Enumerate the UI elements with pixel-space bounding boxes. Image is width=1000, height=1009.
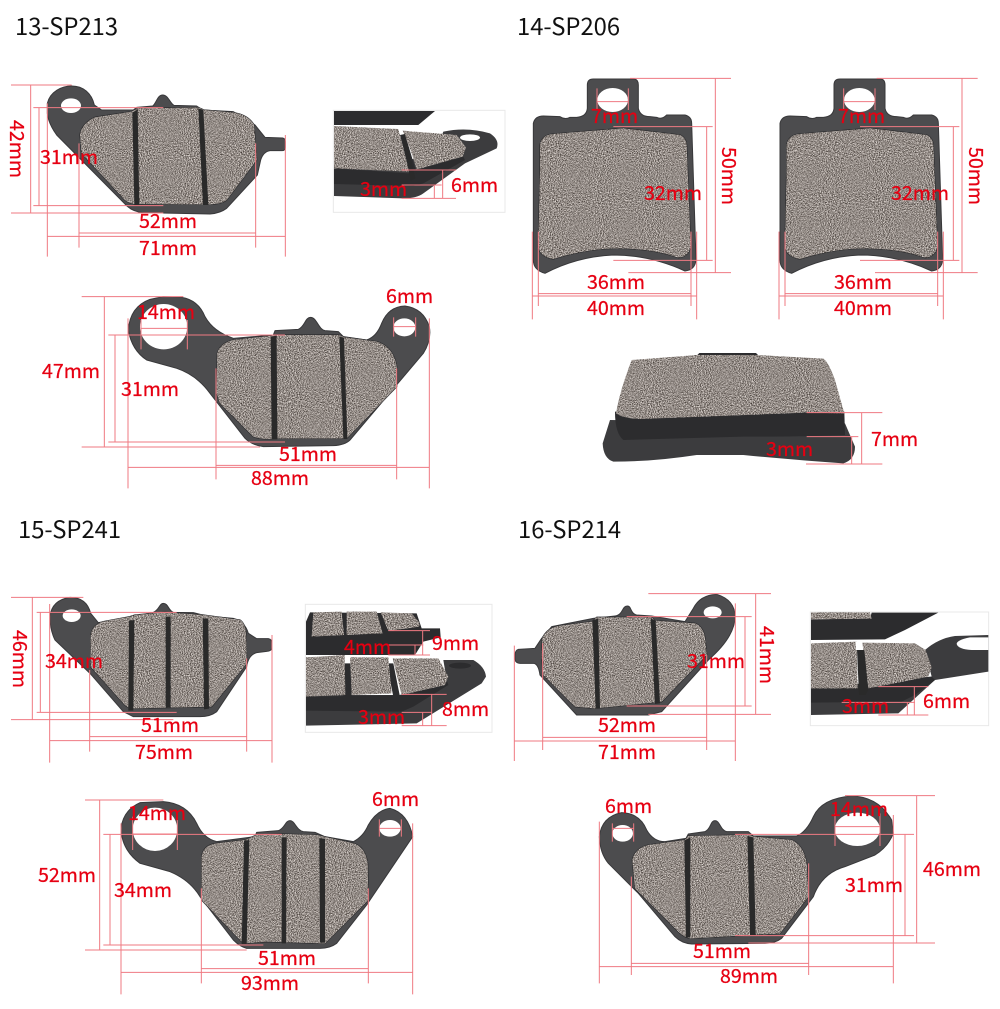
- inset: pad thickness side view: [305, 604, 492, 732]
- dimension labels: 52mm: [139, 205, 197, 234]
- dimension labels: 75mm: [135, 736, 193, 765]
- panel: 16-SP214: [514, 510, 989, 989]
- dimension labels: 4mm: [344, 631, 391, 660]
- dimension labels: 6mm: [372, 783, 419, 812]
- brake pad back view with large hole: [85, 800, 413, 994]
- dimension labels: 89mm: [720, 960, 778, 989]
- dimension labels: 41mm: [754, 626, 783, 684]
- brake pad side view: [603, 353, 882, 464]
- inset: pad thickness side view: [333, 110, 505, 212]
- heading: 15-SP241: 15-SP241: [18, 510, 121, 545]
- dimension labels: 6mm: [386, 280, 433, 309]
- dimension labels: 52mm: [598, 709, 656, 738]
- brake pad front view: [514, 594, 771, 761]
- dimension labels: [7, 627, 489, 996]
- panel: 13-SP213: [4, 7, 505, 491]
- dimension labels: 50mm: [963, 147, 992, 205]
- heading: 13-SP213: 13-SP213: [15, 7, 118, 42]
- dimension labels: 51mm: [279, 438, 337, 467]
- dimension labels: 6mm: [605, 790, 652, 819]
- dimension labels: 7mm: [838, 100, 885, 129]
- heading: 16-SP214: 16-SP214: [518, 510, 621, 545]
- panel: 14-SP206: [517, 7, 992, 464]
- heading: 14-SP206: 14-SP206: [517, 7, 620, 42]
- dimension labels: 71mm: [598, 736, 656, 765]
- dimension labels: 40mm: [834, 292, 892, 321]
- brake pad front view: [11, 597, 272, 763]
- dimension labels: 31mm: [121, 373, 179, 402]
- brake pad back view with large hole: [599, 796, 935, 983]
- dimension labels: 46mm: [7, 630, 36, 688]
- dimension labels: 71mm: [139, 232, 197, 261]
- dimension labels: 3mm: [358, 701, 405, 730]
- dimension labels: 7mm: [871, 423, 918, 452]
- dimension labels: 7mm: [591, 100, 638, 129]
- dimension labels: 3mm: [766, 433, 813, 462]
- dimension labels: 31mm: [687, 645, 745, 674]
- brake pad front view right: [779, 78, 978, 319]
- dimension labels: 47mm: [42, 355, 100, 384]
- dimension labels: 6mm: [451, 169, 498, 198]
- dimension labels: [587, 100, 992, 462]
- dimension labels: 46mm: [923, 853, 981, 882]
- dimension labels: 31mm: [845, 869, 903, 898]
- dimension labels: 40mm: [587, 292, 645, 321]
- brake pad front view: [11, 85, 285, 257]
- dimension labels: 8mm: [442, 693, 489, 722]
- dimension labels: 32mm: [891, 177, 949, 206]
- brake pad back view with large hole: [82, 297, 430, 488]
- dimension labels: 3mm: [842, 690, 889, 719]
- dimension labels: 14mm: [128, 797, 186, 826]
- dimension labels: 34mm: [114, 874, 172, 903]
- dimension labels: 31mm: [40, 141, 98, 170]
- brake pad front view left: [532, 78, 731, 319]
- dimension labels: [598, 626, 981, 989]
- dimension labels: 88mm: [251, 462, 309, 491]
- dimension labels: 36mm: [587, 266, 645, 295]
- dimension labels: 6mm: [923, 685, 970, 714]
- dimension labels: 51mm: [141, 709, 199, 738]
- dimension labels: 51mm: [693, 935, 751, 964]
- dimension labels: 51mm: [258, 942, 316, 971]
- dimension labels: 14mm: [830, 793, 888, 822]
- dimension labels: 3mm: [360, 173, 407, 202]
- dimension labels: 52mm: [38, 859, 96, 888]
- dimension labels: 9mm: [432, 627, 479, 656]
- dimension labels: 32mm: [644, 177, 702, 206]
- dimension labels: [4, 120, 498, 491]
- dimension labels: 34mm: [45, 645, 103, 674]
- dimension labels: 42mm: [4, 120, 33, 178]
- dimension labels: 14mm: [137, 296, 195, 325]
- dimension labels: 36mm: [834, 266, 892, 295]
- dimension labels: 93mm: [241, 967, 299, 996]
- inset: pad thickness side view: [810, 612, 989, 726]
- panel: 15-SP241: [7, 510, 492, 996]
- dimension labels: 50mm: [716, 147, 745, 205]
